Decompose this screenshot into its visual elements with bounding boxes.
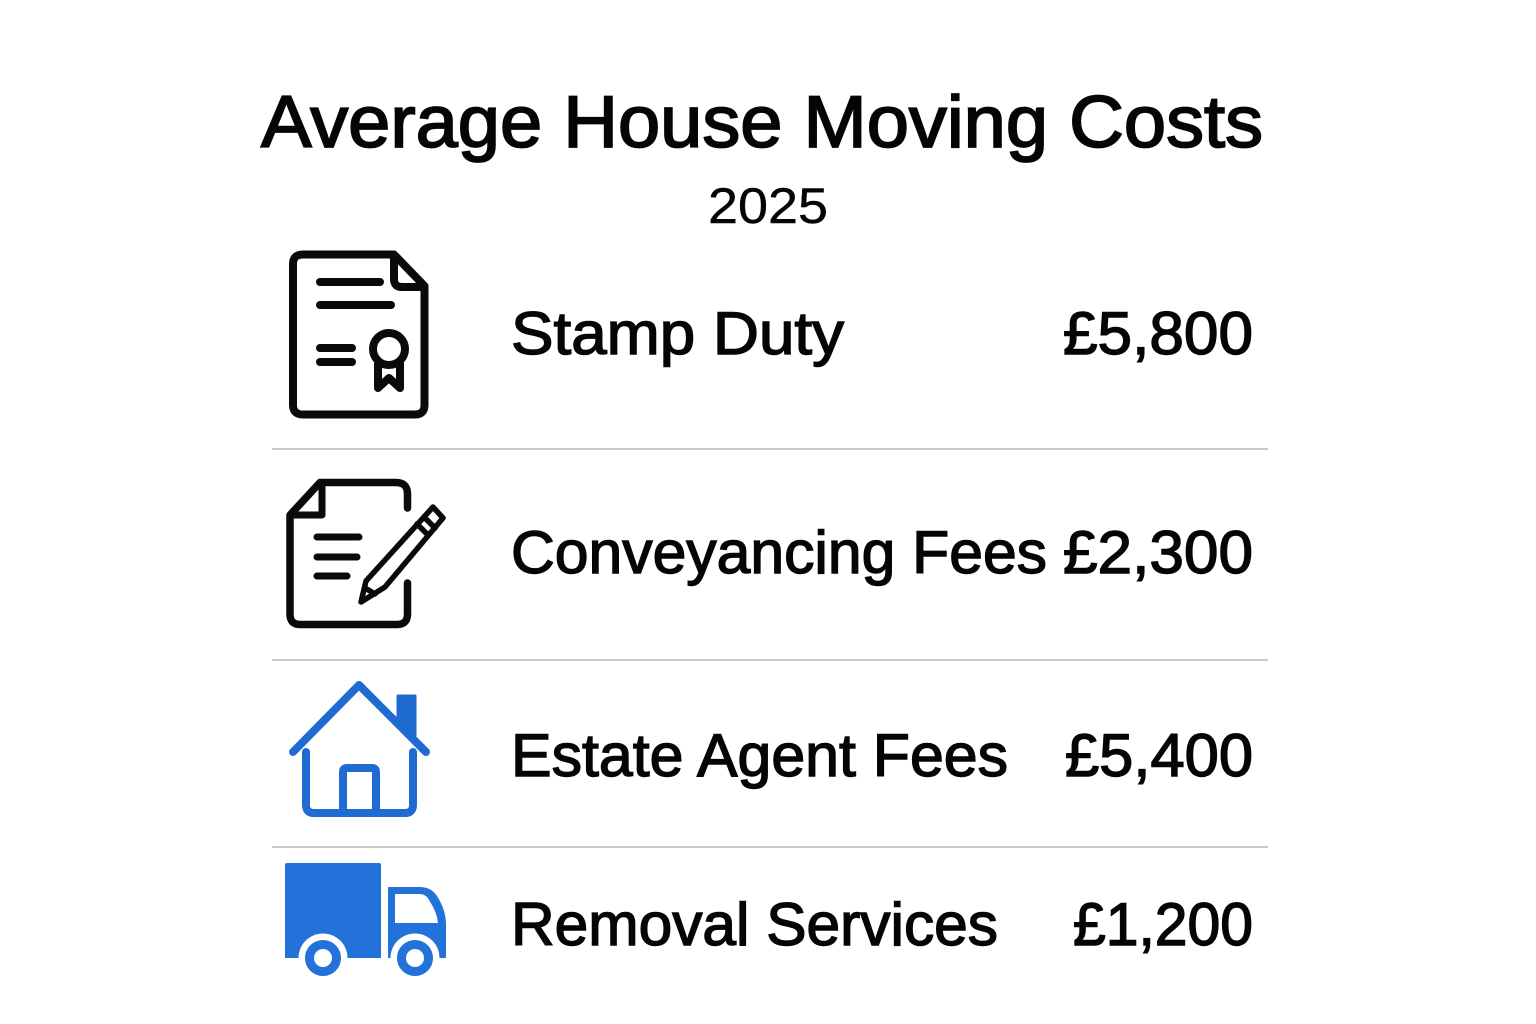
icon: certificate document (293, 254, 424, 414)
value: £1,200 (1073, 891, 1253, 958)
label: Estate Agent Fees (511, 722, 1008, 789)
value: £5,400 (1065, 722, 1253, 789)
value: £2,300 (1063, 519, 1253, 586)
title: Average House Moving Costs (261, 82, 1263, 163)
subtitle: year: 2025 (708, 178, 828, 234)
row: removal services (285, 863, 1253, 982)
icon: house (293, 685, 426, 813)
label: Stamp Duty (511, 300, 844, 367)
row: estate agent fees (293, 685, 1253, 813)
label: Conveyancing Fees (511, 519, 1047, 586)
value: £5,800 (1063, 300, 1253, 367)
row: conveyancing fees (290, 482, 1253, 624)
row: stamp duty (293, 254, 1253, 414)
icon: truck (285, 863, 446, 982)
icon: document with pencil (290, 482, 443, 624)
label: Removal Services (511, 891, 998, 958)
